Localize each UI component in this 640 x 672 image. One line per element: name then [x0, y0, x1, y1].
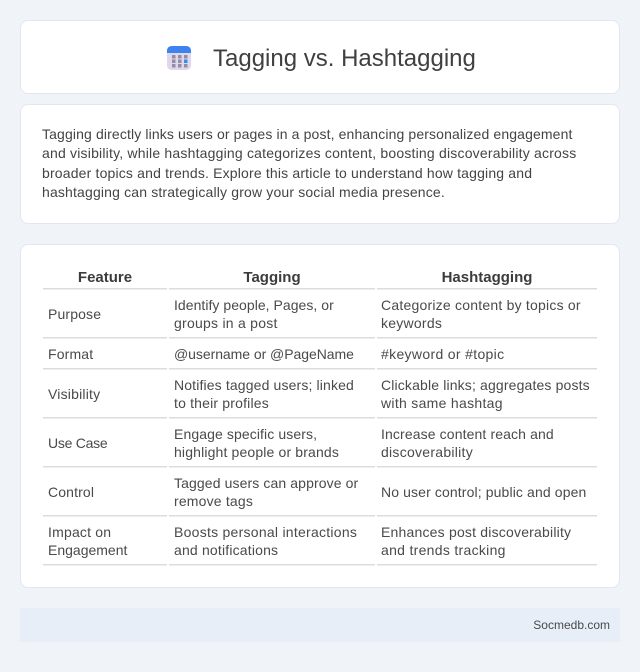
intro text: broader topics and trends. Explore this article to understand how tagging and: [42, 165, 532, 181]
icon: calendar: [167, 46, 191, 70]
table header: Hashtagging: [442, 269, 532, 286]
row: Use Case: Engage specific users,: [174, 426, 317, 442]
row: Purpose: Identify people, Pages, or: [174, 297, 334, 313]
row: Control: Tagged users can approve or: [174, 475, 358, 491]
row: Format: Format: [48, 346, 93, 362]
table header: Tagging: [243, 269, 301, 286]
row: Impact on Engagement: Engagement: [48, 542, 127, 558]
row: Visibility: with same hashtag: [381, 395, 503, 411]
row: Purpose: groups in a post: [174, 315, 278, 331]
row: Impact on Engagement: Impact on: [48, 524, 111, 540]
row: Format: #keyword or #topic: [381, 346, 504, 362]
row: Use Case: [48, 426, 554, 460]
panel: intro card: [20, 104, 620, 224]
intro text: and visibility, while hashtagging categorizes content, boosting discoverability across: [42, 145, 576, 161]
footer bar: [20, 608, 620, 642]
row: Control: [48, 475, 586, 509]
row: Impact on Engagement: and trends tracking: [381, 542, 506, 558]
row: Use Case: highlight people or brands: [174, 444, 339, 460]
row: Purpose: Categorize content by topics or: [381, 297, 581, 313]
row: Impact on Engagement: Enhances post discoverability: [381, 524, 571, 540]
row: Visibility: Clickable links; aggregates posts: [381, 377, 590, 393]
row: Purpose: Purpose: [48, 306, 101, 322]
table header: [78, 269, 532, 286]
row: Use Case: Increase content reach and: [381, 426, 554, 442]
row: Visibility: [48, 377, 590, 411]
row: Format: @username or @PageName: [174, 346, 354, 362]
intro text: hashtagging can strategically grow your social media presence.: [42, 184, 445, 200]
row: Impact on Engagement: Boosts personal interactions: [174, 524, 357, 540]
row: Use Case: discoverability: [381, 444, 473, 460]
intro text: [42, 126, 576, 200]
table header: Feature: [78, 269, 132, 286]
panel: title card: [20, 20, 620, 94]
row: Visibility: Visibility: [48, 386, 100, 402]
footer credit: Socmedb.com: [533, 618, 610, 632]
title: Tagging vs. Hashtagging: [213, 45, 476, 72]
row: Control: No user control; public and open: [381, 484, 586, 500]
row: Use Case: Use Case: [48, 435, 107, 451]
row: Impact on Engagement: and notifications: [174, 542, 278, 558]
row: Purpose: keywords: [381, 315, 442, 331]
intro text: Tagging directly links users or pages in a post, enhancing personalized engagement: [42, 126, 573, 142]
row: Format: [48, 346, 504, 362]
panel: comparison table card: [20, 244, 620, 588]
row: Impact on Engagement: [48, 524, 571, 558]
row: Control: Control: [48, 484, 94, 500]
row: Visibility: to their profiles: [174, 395, 269, 411]
row: Purpose: [48, 297, 581, 331]
row: Visibility: Notifies tagged users; linked: [174, 377, 354, 393]
row: Control: remove tags: [174, 493, 253, 509]
